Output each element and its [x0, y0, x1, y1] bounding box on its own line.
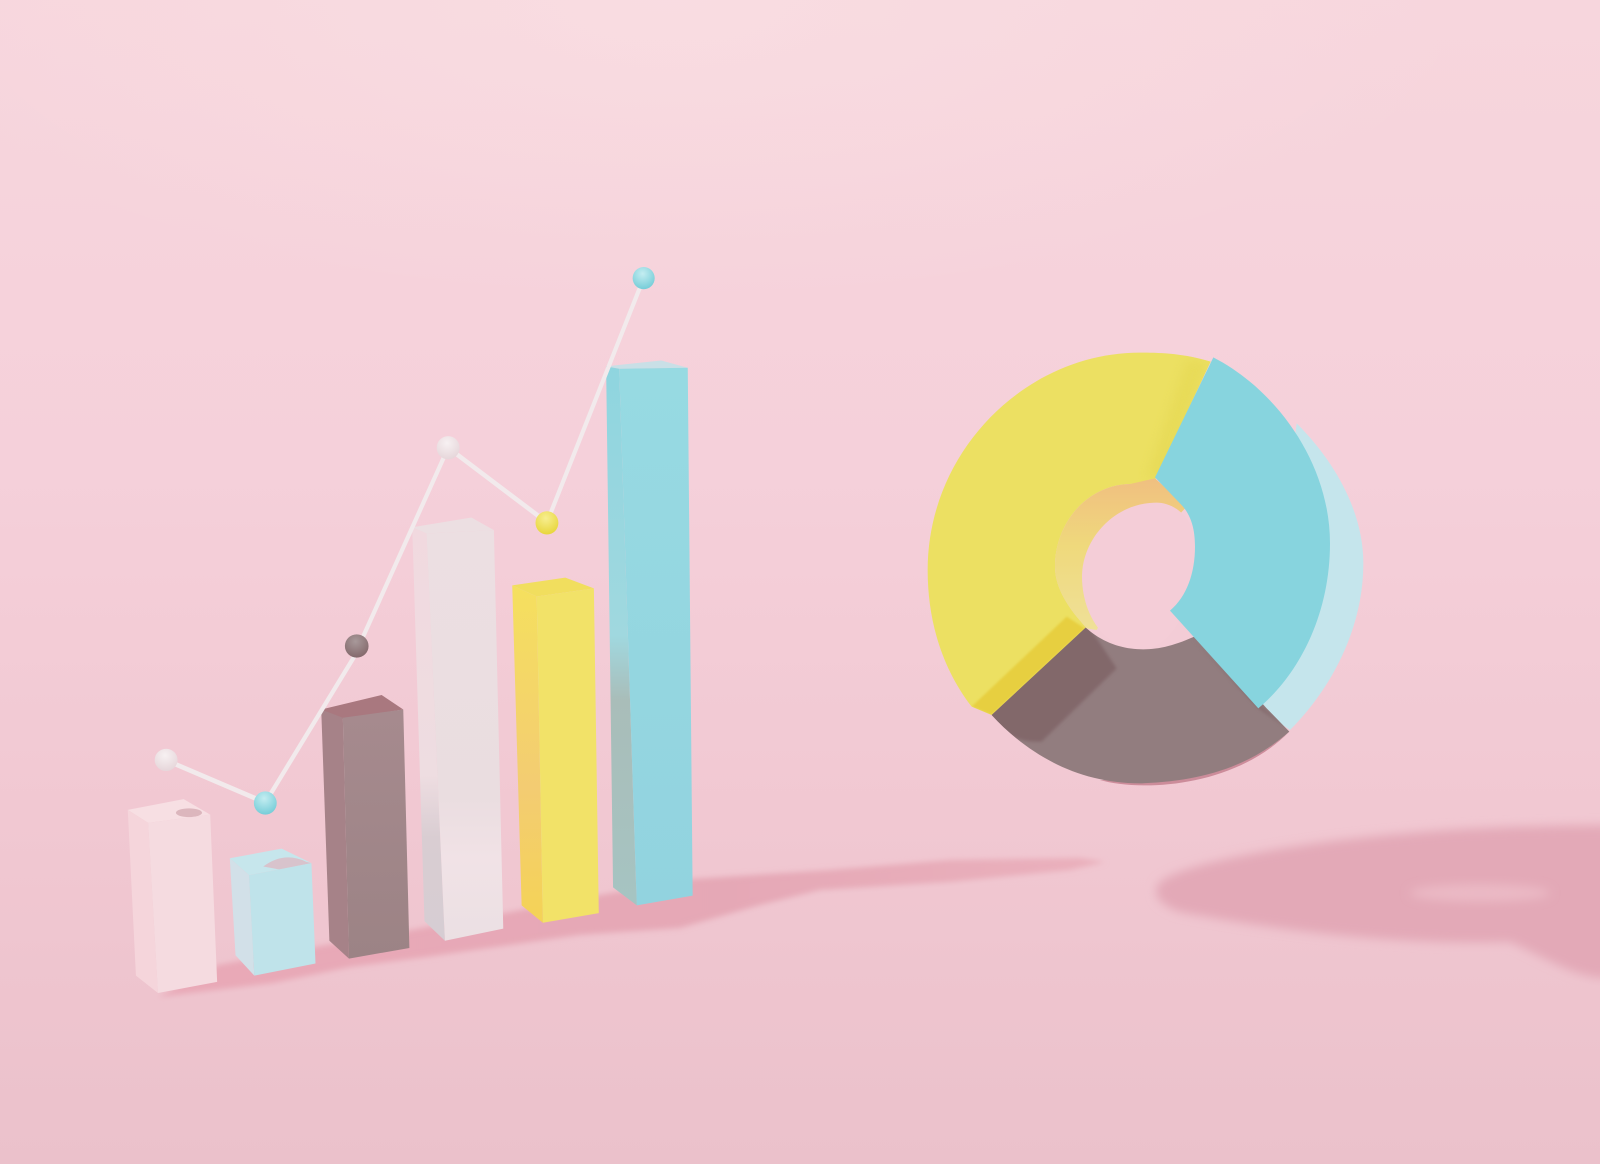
bar 6: cyan — [606, 361, 693, 905]
data points — [155, 267, 655, 815]
bar 4: white — [412, 518, 503, 941]
floor shadow of donut — [1156, 825, 1600, 978]
bar chart — [128, 267, 693, 993]
bar 5: yellow — [512, 578, 599, 923]
donut back edge — [1100, 423, 1363, 785]
donut chart — [928, 353, 1363, 785]
bar 1: pale pink — [128, 799, 217, 993]
bar 2: pale blue — [230, 849, 316, 976]
donut inner wall — [1055, 478, 1187, 630]
segment: yellow — [928, 353, 1211, 715]
segment: grey-brown — [987, 623, 1289, 783]
floor shadow of bars — [158, 858, 1105, 997]
trend line — [165, 278, 644, 803]
donut hole — [1082, 503, 1195, 649]
segment: cyan — [1155, 357, 1330, 708]
bar 3: mauve — [321, 695, 409, 959]
